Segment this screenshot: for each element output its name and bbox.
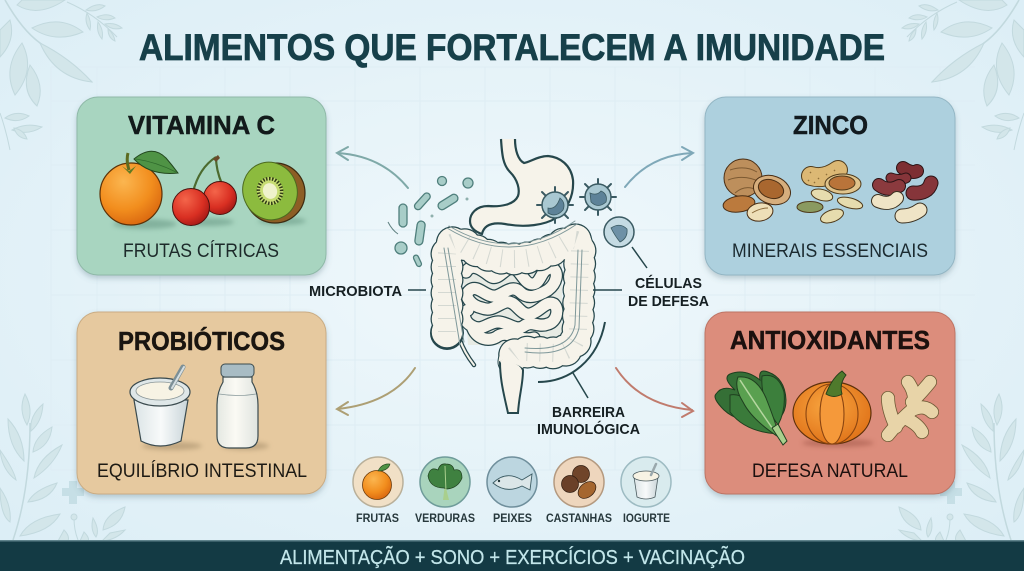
label: barreira imunológica xyxy=(537,373,640,438)
food item: iogurte xyxy=(621,457,671,525)
icon: defense cell 1 xyxy=(537,187,573,223)
panel: vitamina C xyxy=(77,97,326,275)
panel: zinco xyxy=(705,97,955,275)
arrow: to zinco xyxy=(625,147,693,187)
icon: kiwi xyxy=(234,154,306,228)
title: ALIMENTOS QUE FORTALECEM A IMUNIDADE xyxy=(139,27,885,68)
panel: antioxidantes xyxy=(705,312,955,494)
food item: frutas xyxy=(353,457,403,525)
label: células de defesa: DE DEFESA xyxy=(628,293,709,310)
food item: peixes: PEIXES xyxy=(493,513,532,525)
food item: verduras: VERDURAS xyxy=(415,513,475,525)
immune barrier arc xyxy=(538,322,605,382)
icon: walnuts and almonds xyxy=(722,159,795,223)
icon: defense cell 2 xyxy=(580,179,616,215)
food item: castanhas: CASTANHAS xyxy=(546,513,612,525)
food item: frutas: FRUTAS xyxy=(356,513,399,525)
icon: milk bottle xyxy=(217,364,269,450)
arrow: to probióticos xyxy=(337,368,415,415)
stomach xyxy=(470,139,573,234)
subtitle: frutas cítricas: FRUTAS CÍTRICAS xyxy=(123,241,279,262)
arrow: to vitamina C xyxy=(337,147,408,188)
heading: antioxidantes: ANTIOXIDANTES xyxy=(730,325,930,355)
illustration: digestive system xyxy=(431,139,582,413)
food item: peixes xyxy=(487,457,537,525)
icon: orange xyxy=(100,151,178,229)
food item: verduras xyxy=(415,457,475,525)
arrow: to antioxidantes xyxy=(616,368,693,417)
label: microbiota: MICROBIOTA xyxy=(309,284,403,300)
footer bar xyxy=(0,540,1024,571)
icon: defense cell 3 xyxy=(604,217,634,247)
heading: vitamina C: VITAMINA C xyxy=(128,110,275,140)
heading: zinco: ZINCO xyxy=(793,110,868,140)
appendix xyxy=(460,340,474,365)
icon: yogurt cup xyxy=(130,367,202,450)
label: barreira imunológica: BARREIRA xyxy=(552,404,625,421)
label: barreira imunológica: IMUNOLÓGICA xyxy=(537,420,640,438)
icon: beans xyxy=(878,168,931,216)
food item: castanhas xyxy=(546,457,612,525)
food item: iogurte: IOGURTE xyxy=(623,513,670,525)
rectum xyxy=(500,360,523,413)
illustration: microbiota bacteria xyxy=(388,176,473,267)
panel: probióticos xyxy=(77,312,326,494)
footer text: ALIMENTAÇÃO + SONO + EXERCÍCIOS + VACINAÇÃO xyxy=(280,545,745,569)
label: células de defesa: CÉLULAS xyxy=(635,275,702,292)
large intestine xyxy=(431,221,582,362)
icon: acerola cherries xyxy=(172,155,236,226)
subtitle: defesa natural: DEFESA NATURAL xyxy=(752,461,908,482)
heading: probióticos: PROBIÓTICOS xyxy=(118,326,285,356)
small intestine xyxy=(462,262,562,345)
label: células de defesa xyxy=(593,247,709,310)
icon: spinach xyxy=(715,371,787,445)
icon: ginger xyxy=(888,382,932,435)
icon: pumpkin xyxy=(793,371,874,447)
icon: peanuts and seeds xyxy=(797,170,864,226)
subtitle: minerais essenciais: MINERAIS ESSENCIAIS xyxy=(732,241,928,262)
subtitle: equilíbrio intestinal: EQUILÍBRIO INTESTINAL xyxy=(97,461,307,482)
